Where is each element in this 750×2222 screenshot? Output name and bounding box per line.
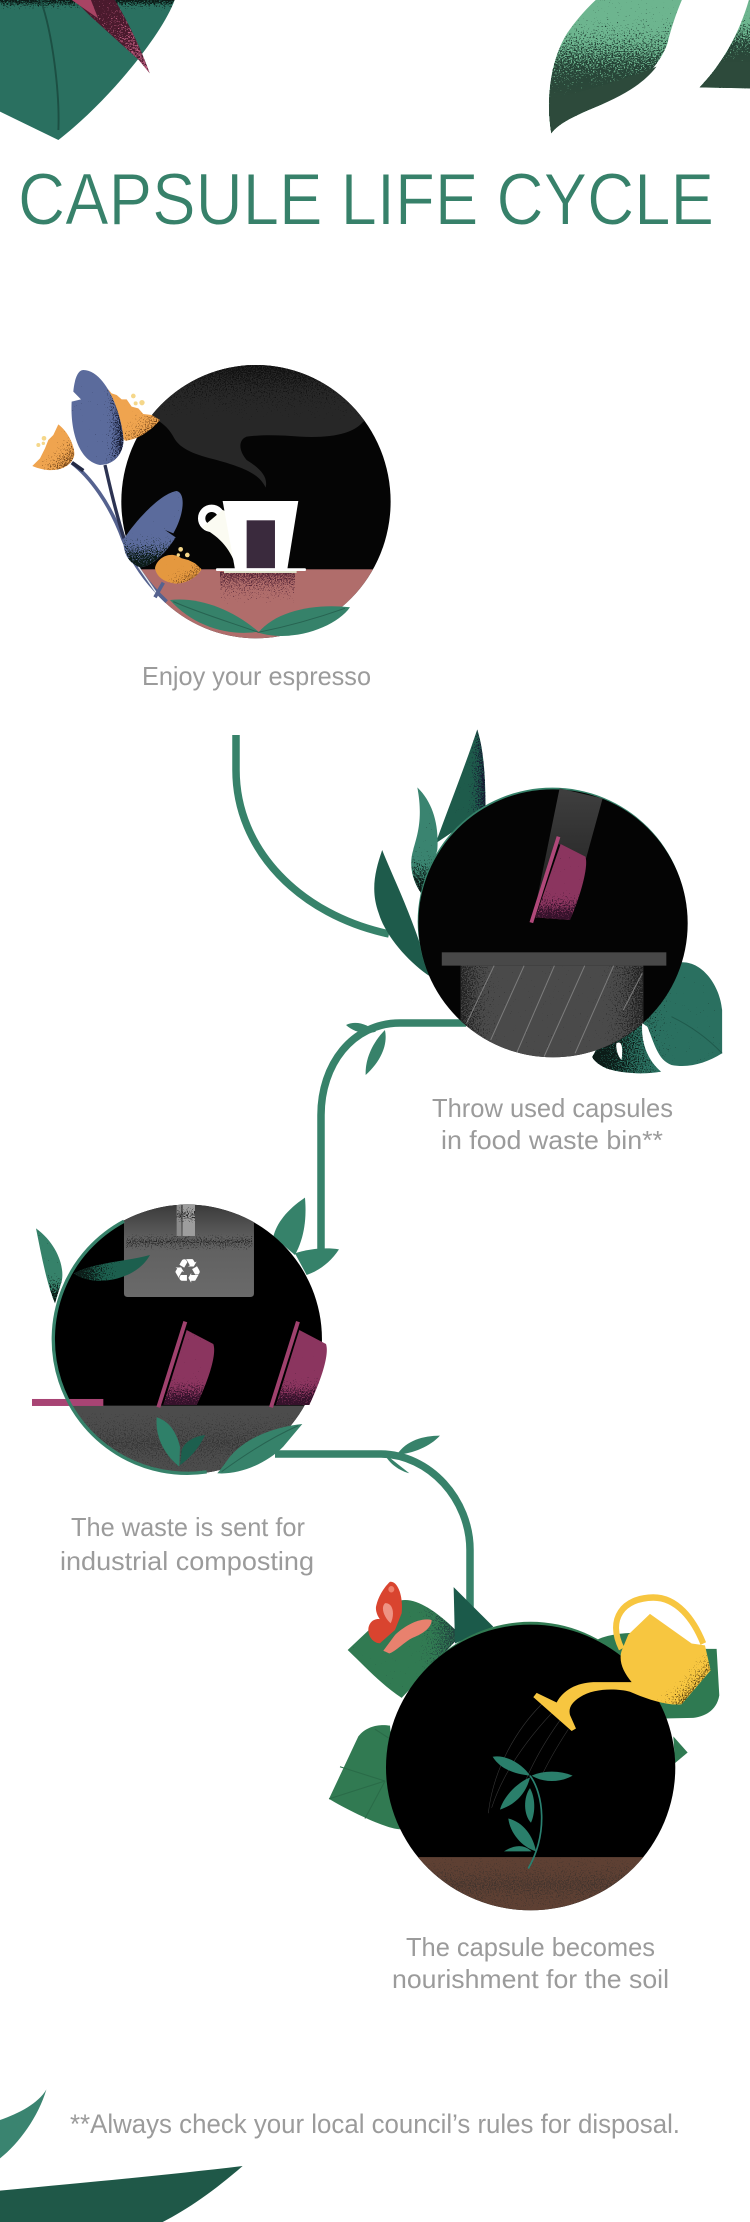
panel: enjoy your espresso — [32, 360, 400, 646]
espresso cup — [202, 501, 306, 573]
decorative leaves: bottom left — [0, 2089, 243, 2222]
chute — [533, 788, 603, 918]
caption: throw used capsules: Throw used capsules — [432, 1093, 673, 1123]
steam — [152, 365, 366, 488]
pink ledge — [32, 1399, 103, 1406]
decorative leaves: top right — [549, 0, 750, 133]
falling capsule — [531, 837, 586, 923]
table — [141, 569, 373, 638]
leaves behind the circle — [374, 729, 722, 1073]
vine: composting to soil — [275, 1454, 470, 1610]
leaves at the base — [170, 599, 350, 636]
vine: bin to composting — [321, 1023, 466, 1250]
waste bin — [460, 966, 644, 1058]
caption: the waste is sent for: The waste is sent for — [71, 1512, 305, 1542]
front leaves — [156, 1417, 302, 1473]
caption: nourishment for the soil: nourishment for the soil — [392, 1964, 669, 1994]
circle background — [121, 365, 391, 638]
watering can — [533, 1597, 711, 1731]
seedling — [493, 1756, 573, 1869]
panel: the capsule becomes nourishment — [329, 1582, 719, 1912]
caption: in food waste bin: in food waste bin** — [441, 1125, 663, 1155]
leaves behind the circle — [329, 1587, 719, 1829]
vine: espresso to bin — [236, 735, 389, 934]
butterfly — [368, 1582, 432, 1654]
footnote: **Always check your local council’s rules for disposal. — [70, 2109, 680, 2139]
junction leaves — [346, 1023, 386, 1075]
green rim — [391, 1622, 671, 1907]
leaves behind the circle — [36, 1198, 339, 1303]
water drops — [488, 1704, 568, 1813]
decorative leaves: top left — [0, 0, 175, 140]
caption: the capsule becomes: The capsule becomes — [406, 1932, 655, 1962]
bin lid — [442, 952, 666, 966]
capsule right — [271, 1322, 327, 1407]
recycling bin — [124, 1200, 254, 1297]
circle background — [53, 1205, 322, 1474]
green rim — [53, 1221, 207, 1473]
green rim — [418, 788, 687, 1056]
panel: waste sent for industrial composting — [32, 1198, 440, 1476]
caption: enjoy your espresso: Enjoy your espresso — [142, 661, 371, 691]
circle background — [386, 1625, 675, 1910]
blue flower plant — [32, 370, 202, 602]
floor — [73, 1406, 304, 1472]
recycling bin: ♻ — [173, 1252, 203, 1291]
caption: industrial composting: industrial composting — [60, 1546, 314, 1576]
circle background — [418, 789, 688, 1057]
panel: throw used capsules in food waste bin — [346, 729, 722, 1075]
soil — [418, 1857, 644, 1910]
capsule left — [158, 1322, 214, 1407]
junction leaves — [383, 1436, 440, 1473]
dark leaf — [74, 1255, 150, 1281]
